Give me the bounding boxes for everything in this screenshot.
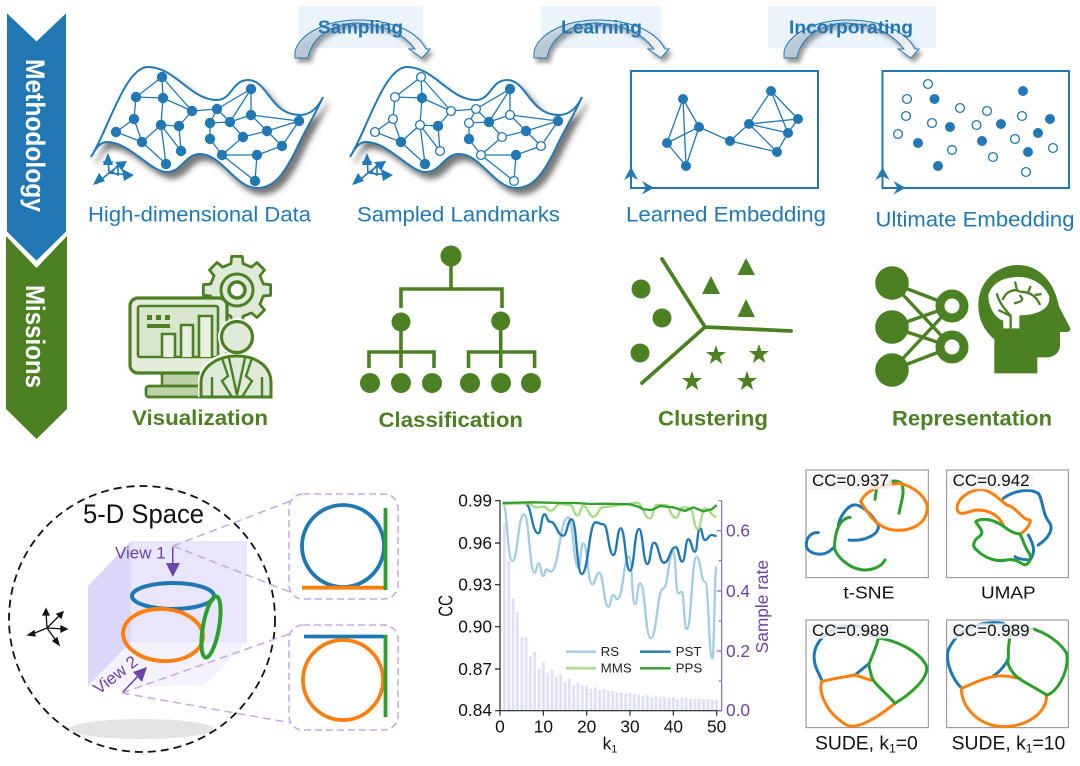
- step label: Sampling: Sampling: [318, 18, 403, 38]
- label: Representation: Representation: [892, 407, 1052, 431]
- view 2 label and arrow: View 2: [90, 652, 141, 698]
- left and bottom axes: 10: [534, 717, 553, 737]
- label: Visualization: Visualization: [132, 406, 268, 430]
- banner: Methodology: [6, 11, 67, 262]
- plot: SUDE k1=0: SUDE, k: [815, 733, 889, 754]
- legend: [566, 644, 702, 676]
- icon: head with brain: [978, 265, 1070, 373]
- left and bottom axes: 0.93: [458, 575, 492, 595]
- step box: Incorporating: [768, 6, 936, 48]
- step label: Incorporating: Incorporating: [789, 18, 913, 38]
- plot: SUDE k1=10: [947, 620, 1068, 756]
- plot: SUDE k1=0: =0: [896, 733, 918, 754]
- plot: SUDE k1=10: CC=0.989: [953, 621, 1030, 640]
- panel: ultimate embedding: [876, 71, 1069, 194]
- left and bottom axes: 0.87: [458, 659, 492, 679]
- legend: MMS: [601, 661, 632, 676]
- plot: SUDE k1=10: 1: [1026, 742, 1033, 756]
- plot: UMAP: CC=0.942: [953, 471, 1030, 490]
- left and bottom axes: CC: [436, 595, 458, 617]
- right axis: sample rate: 0.0: [726, 700, 750, 720]
- left and bottom axes: 30: [620, 717, 640, 737]
- left and bottom axes: [436, 491, 726, 756]
- banner: Missions: [6, 236, 67, 439]
- cube walls: [88, 541, 247, 686]
- panel: 5-D space schematic: [9, 486, 295, 752]
- left and bottom axes: 50: [707, 717, 726, 737]
- step box: Learning: [541, 6, 661, 48]
- left and bottom axes: 0.99: [458, 491, 492, 511]
- sample rate bars: [503, 523, 718, 710]
- step label: Learning: Learning: [561, 18, 642, 38]
- right axis: sample rate: Sample rate: [752, 560, 772, 653]
- right axis: sample rate: 0.2: [726, 641, 750, 661]
- axes icon: [28, 609, 67, 645]
- arrow: learning: [534, 20, 669, 58]
- right axis: sample rate: [717, 501, 772, 720]
- left and bottom axes: 0.90: [458, 617, 492, 637]
- view 1 label and arrow: View 1: [115, 544, 166, 563]
- line: PST: [503, 503, 717, 574]
- projection lines: [122, 500, 295, 723]
- icon: classification tree: [360, 246, 541, 393]
- panel: view 1 projection: [289, 494, 398, 599]
- panel: sampled landmarks manifold: [350, 67, 582, 188]
- line: RS: [503, 503, 717, 658]
- left and bottom axes: 20: [577, 717, 596, 737]
- caption: High-dimensional Data: High-dimensional Data: [88, 203, 311, 227]
- plot: t-SNE: [806, 470, 928, 602]
- left and bottom axes: 40: [664, 717, 683, 737]
- ground shadow: [70, 719, 214, 739]
- caption: Ultimate Embedding: Ultimate Embedding: [876, 208, 1074, 232]
- arrow: sampling: [295, 20, 430, 58]
- icon: neural network: [875, 266, 964, 387]
- plot: UMAP: [947, 470, 1068, 602]
- heading: 5-D Space: 5-D Space: [83, 499, 204, 529]
- rings: [121, 583, 224, 664]
- legend: PPS: [676, 661, 702, 676]
- caption: Learned Embedding: Learned Embedding: [626, 203, 826, 227]
- legend: RS: [601, 644, 619, 659]
- plot: SUDE k1=0: CC=0.989: [812, 621, 889, 640]
- right axis: sample rate: 0.6: [726, 521, 750, 541]
- plot: UMAP: UMAP: [981, 582, 1036, 602]
- plot: t-SNE: t-SNE: [843, 582, 894, 602]
- legend: PST: [676, 644, 702, 659]
- left and bottom axes: 0: [495, 717, 505, 737]
- panel: view 2 projection: [289, 625, 398, 730]
- left and bottom axes: 0.84: [458, 700, 492, 720]
- icon: visualization: [130, 256, 273, 397]
- icon: clustering: [630, 258, 791, 390]
- left and bottom axes: k: [603, 733, 611, 753]
- plot: SUDE k1=10: =10: [1032, 733, 1065, 754]
- label: Classification: Classification: [378, 408, 523, 432]
- plot: t-SNE: CC=0.937: [812, 471, 889, 490]
- banner: Missions: Missions: [20, 285, 50, 388]
- line: PPS: [503, 502, 717, 511]
- dashed sphere: [9, 486, 275, 752]
- line: MMS: [503, 503, 717, 529]
- chart: CC and sample rate vs k1: [436, 491, 772, 756]
- panel: embedding comparisons: [806, 470, 1068, 756]
- plot: SUDE k1=0: 1: [889, 742, 896, 756]
- panel: learned embedding: [624, 71, 818, 194]
- plot: SUDE k1=0: [806, 620, 928, 756]
- caption: Sampled Landmarks: Sampled Landmarks: [357, 203, 560, 227]
- plot: SUDE k1=10: SUDE, k: [952, 733, 1026, 754]
- arrow: incorporating: [784, 20, 919, 58]
- banner: Methodology: Methodology: [20, 59, 50, 212]
- step box: Sampling: [298, 6, 423, 48]
- panel: high-dimensional data manifold: [91, 67, 323, 188]
- left and bottom axes: 1: [611, 744, 617, 756]
- label: Clustering: Clustering: [658, 407, 768, 431]
- right axis: sample rate: 0.4: [726, 581, 750, 601]
- view 1 label and arrow: [115, 544, 180, 577]
- left and bottom axes: 0.96: [458, 533, 492, 553]
